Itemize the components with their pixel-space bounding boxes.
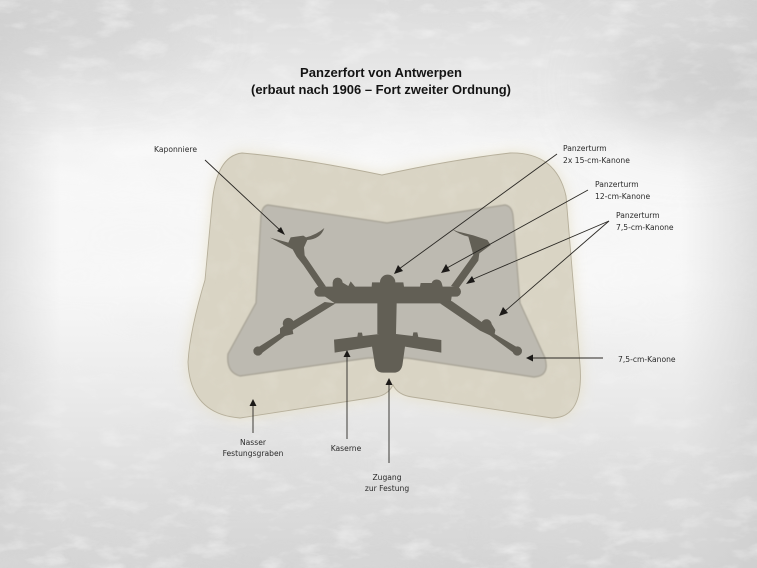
label: 7,5-cm-Kanone xyxy=(526,354,676,364)
fort plan xyxy=(180,145,590,425)
label: Panzerturm 7,5-cm-Kanone: 7,5-cm-Kanone xyxy=(616,223,674,232)
label: Panzerturm 12-cm-Kanone xyxy=(441,180,650,273)
right lower arm xyxy=(440,301,521,355)
barracks and gate xyxy=(334,332,441,373)
label: 7,5-cm-Kanone: 7,5-cm-Kanone xyxy=(618,355,676,364)
title: Panzerfort von Antwerpen xyxy=(300,65,462,80)
label: Zugang zur Festung: Zugang xyxy=(372,473,402,482)
label: Panzerturm 12-cm-Kanone: Panzerturm xyxy=(595,180,639,189)
label: Zugang zur Festung: zur Festung xyxy=(365,484,409,493)
label: Kaserne xyxy=(331,350,362,453)
label: Panzerturm 12-cm-Kanone: 12-cm-Kanone xyxy=(595,192,650,201)
label: Nasser Festungsgraben xyxy=(223,399,284,458)
label: Kaponniere: Kaponniere xyxy=(154,145,197,154)
left upper arm and kaponniere xyxy=(270,228,326,287)
left lower arm xyxy=(256,302,336,354)
label: Panzerturm 2x 15-cm-Kanone: 2x 15-cm-Kanone xyxy=(563,156,630,165)
label: Kaserne: Kaserne xyxy=(331,444,362,453)
main rampart bar xyxy=(314,275,461,334)
label: Kaponniere xyxy=(154,145,285,235)
label: Panzerturm 2x 15-cm-Kanone: Panzerturm xyxy=(563,144,607,153)
right upper arm and kaponniere xyxy=(451,229,491,288)
inner fort ground xyxy=(228,205,546,377)
label: Nasser Festungsgraben: Nasser xyxy=(240,438,267,447)
fort structure xyxy=(253,228,522,373)
label: Panzerturm 7,5-cm-Kanone: Panzerturm xyxy=(616,211,660,220)
label: Panzerturm 7,5-cm-Kanone xyxy=(466,211,674,316)
label: Zugang zur Festung xyxy=(365,378,409,493)
wet moat xyxy=(188,153,580,418)
label: Panzerturm 2x 15-cm-Kanone xyxy=(394,144,630,274)
title: (erbaut nach 1906 – Fort zweiter Ordnung) xyxy=(251,82,511,97)
outer glow of moat xyxy=(187,152,581,419)
title xyxy=(251,65,511,97)
label: Nasser Festungsgraben: Festungsgraben xyxy=(223,449,284,458)
